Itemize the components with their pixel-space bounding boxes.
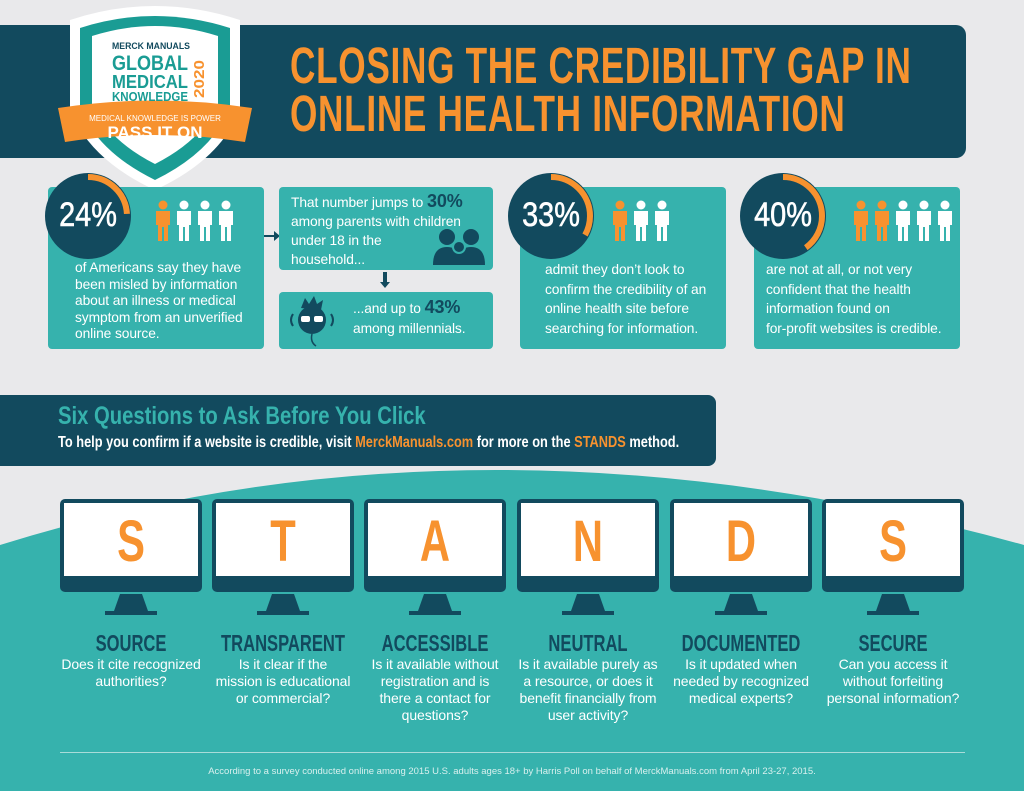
question: secure: without forfeiting — [843, 673, 943, 689]
stat 3: 33%: admit they don’t look to — [545, 262, 684, 277]
badge logo: MEDICAL — [112, 72, 188, 92]
monitor T: T — [270, 508, 296, 574]
panel: 43% millennials: among millennials. — [353, 320, 465, 336]
stat 1: 24%: of Americans say they have — [75, 260, 241, 275]
question: accessible: there a contact for — [380, 690, 490, 706]
stat 1: 24%: symptom from an unverified — [75, 310, 243, 324]
six questions banner: To help you confirm if a website is credible, visit MerckManuals.com for more on the STANDS method. — [58, 434, 679, 451]
question: accessible: ACCESSIBLE — [382, 630, 488, 656]
stat 1: 24%: been misled by information — [75, 276, 237, 292]
question: neutral: Is it available purely as — [518, 656, 658, 672]
monitor A — [364, 499, 506, 615]
header band — [0, 25, 966, 158]
badge logo: MERCK MANUALS — [112, 41, 190, 51]
question: accessible: Is it available without — [372, 656, 498, 672]
question: secure — [827, 630, 959, 706]
question: documented: DOCUMENTED — [682, 630, 800, 656]
panel: 43% millennials: ...and up to 43% — [353, 297, 460, 317]
stat 4: 40%: information found on — [766, 301, 890, 316]
monitor T — [212, 499, 354, 615]
question: accessible: questions? — [402, 707, 468, 723]
question: transparent: or commercial? — [236, 690, 330, 706]
people row 1 — [156, 200, 233, 241]
question: accessible — [372, 630, 498, 723]
question: documented: medical experts? — [689, 690, 793, 706]
question: neutral — [518, 630, 658, 723]
question: accessible: registration and is — [381, 673, 489, 689]
badge logo: GLOBAL — [112, 52, 188, 75]
title — [290, 37, 912, 142]
stat 1: 24%: online source. — [75, 326, 160, 341]
stat 4: 40%: are not at all, or not very — [766, 262, 912, 277]
panel: 30% parents: among parents with children — [291, 214, 461, 229]
badge logo: KNOWLEDGE — [112, 89, 188, 104]
question: neutral: NEUTRAL — [548, 630, 628, 656]
monitor S — [60, 499, 202, 615]
six questions banner: Six Questions to Ask Before You Click — [58, 402, 426, 430]
title: CLOSING THE CREDIBILITY GAP IN — [290, 37, 912, 94]
icon: parents — [433, 229, 485, 265]
question: documented — [673, 630, 809, 706]
question: documented: Is it updated when — [685, 656, 797, 672]
panel: 43% millennials — [279, 292, 493, 349]
title: ONLINE HEALTH INFORMATION — [290, 85, 845, 142]
stat 1: 24%: 24% — [59, 196, 117, 234]
panel: 30% parents — [279, 187, 493, 270]
stat 3: 33% — [508, 173, 726, 349]
question: neutral: a resource, or does it — [523, 673, 653, 689]
stat 1: 24% — [45, 173, 264, 349]
question: transparent: mission is educational — [216, 673, 350, 689]
question: neutral: user activity? — [548, 707, 628, 723]
stat 4: 40%: confident that the health — [766, 282, 911, 296]
monitor S: S — [117, 508, 145, 574]
panel: 30% parents: under 18 in the — [291, 233, 382, 248]
question: neutral: benefit financially from — [520, 690, 656, 706]
icon: millennial — [290, 296, 334, 346]
question: secure: SECURE — [858, 630, 928, 656]
stat 3: 33%: 33% — [522, 196, 580, 234]
monitor S2 — [822, 499, 964, 615]
panel: 30% parents: That number jumps to 30% — [291, 191, 463, 211]
arrow down — [380, 272, 390, 288]
stat 4: 40%: for-profit websites is credible. — [766, 320, 941, 336]
stat 3: 33%: online health site before — [545, 301, 689, 316]
monitor N: N — [573, 508, 603, 574]
question: secure: Can you access it — [839, 656, 947, 672]
badge logo — [58, 6, 252, 187]
question: transparent — [216, 630, 350, 706]
monitor N — [517, 499, 659, 615]
arrow right — [264, 231, 279, 241]
question: source: authorities? — [95, 673, 167, 689]
badge logo: 2020 — [191, 60, 208, 98]
monitor A: A — [420, 508, 450, 574]
six questions banner — [0, 395, 716, 466]
question: transparent: TRANSPARENT — [221, 630, 345, 656]
monitor D — [670, 499, 812, 615]
question: documented: needed by recognized — [673, 673, 809, 689]
question: source: Does it cite recognized — [61, 656, 201, 672]
badge logo: PASS IT ON — [107, 123, 203, 142]
stat 4: 40%: 40% — [754, 196, 812, 234]
stat 3: 33%: confirm the credibility of an — [545, 282, 706, 296]
monitor S2: S — [879, 508, 907, 574]
question: transparent: Is it clear if the — [239, 656, 327, 672]
question: source: SOURCE — [96, 630, 166, 656]
stat 3: 33%: searching for information. — [545, 320, 698, 336]
stat 1: 24%: about an illness or medical — [75, 293, 236, 308]
badge logo: MEDICAL KNOWLEDGE IS POWER — [89, 114, 221, 123]
stat 4: 40% — [740, 173, 960, 349]
panel: 30% parents: household... — [291, 252, 365, 267]
footer source note: According to a survey conducted online among 2015 U.S. adults ages 18+ by Harris Poll on behalf of MerckManuals.com from April 23-27, 2015. — [208, 766, 816, 777]
question: source — [61, 630, 201, 689]
monitor D: D — [726, 508, 756, 574]
question: secure: personal information? — [827, 690, 959, 706]
